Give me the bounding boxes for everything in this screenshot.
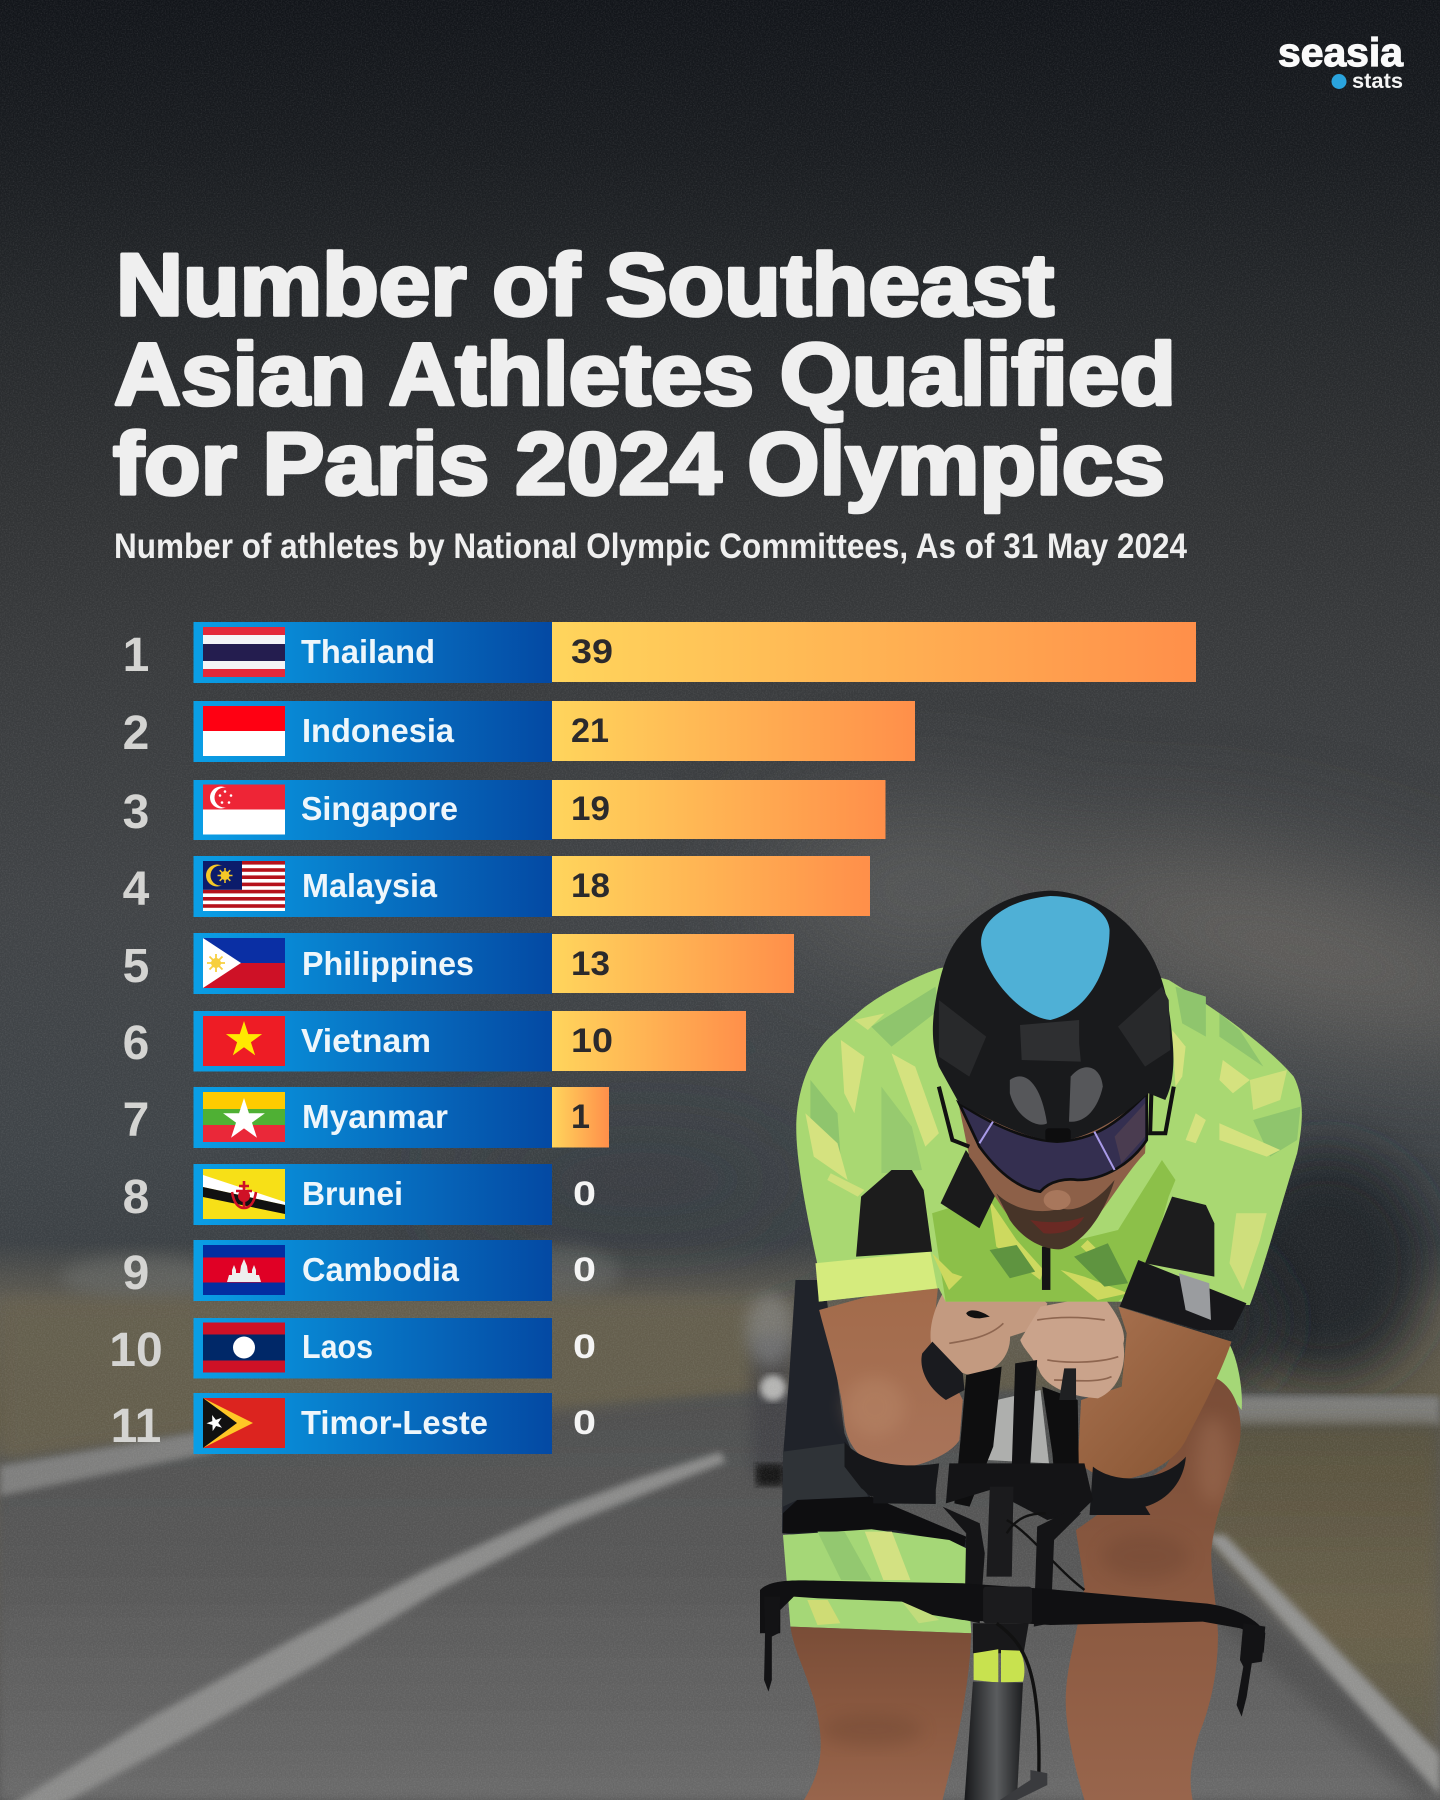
flag: Vietnam [203, 1016, 285, 1066]
flag: Philippines [203, 938, 285, 988]
country bar [194, 1318, 552, 1378]
value: 0 [573, 1175, 596, 1213]
row 10 Laos [109, 1318, 596, 1378]
left hand [931, 1275, 1047, 1375]
flag: Thailand [203, 627, 285, 677]
country name: Brunei [302, 1175, 403, 1212]
handlebar [760, 1580, 1265, 1653]
right hand [1020, 1295, 1124, 1398]
value: 0 [573, 1328, 596, 1366]
lower body [760, 1275, 1265, 1800]
watch [921, 1342, 964, 1400]
country bar [194, 1011, 552, 1072]
country bar [194, 1240, 552, 1301]
value: 1 [571, 1098, 590, 1136]
country name: Timor-Leste [301, 1404, 488, 1441]
rank: 10 [109, 1324, 163, 1377]
bike hub [946, 1463, 1093, 1520]
rank: 9 [123, 1247, 149, 1300]
country bar [194, 1087, 552, 1148]
brake cable [997, 1623, 1039, 1773]
rank: 5 [123, 940, 149, 993]
upper body [796, 891, 1302, 1330]
flag: Singapore [203, 784, 285, 834]
rank: 7 [123, 1094, 149, 1147]
flag: Timor-Leste [203, 1398, 285, 1448]
value: 19 [571, 790, 610, 828]
green shorts right [1216, 1345, 1242, 1410]
lips [1030, 1217, 1084, 1234]
left riser [943, 1507, 985, 1623]
country bar [194, 780, 552, 840]
country name: Laos [302, 1328, 373, 1365]
central gap white frame [986, 1390, 1049, 1463]
row 8 Brunei [123, 1164, 596, 1225]
jersey chest [932, 1160, 1175, 1302]
country name: Myanmar [302, 1098, 448, 1135]
value: 39 [571, 633, 613, 671]
country name: Cambodia [302, 1251, 460, 1288]
left arm [819, 1277, 963, 1468]
row 4 Malaysia [123, 856, 870, 917]
subtitle: Number of athletes by National Olympic Committees, As of 31 May 2024 [114, 527, 1187, 566]
goggle visor [959, 1093, 1147, 1192]
jersey hem [815, 1252, 937, 1302]
armband [1120, 1260, 1246, 1330]
yellow frame band [974, 1649, 1024, 1683]
left elbow pad [844, 1442, 939, 1504]
left sleeve panel [856, 1170, 932, 1257]
left brake lever [764, 1597, 780, 1692]
rank: 11 [111, 1400, 161, 1453]
stem [986, 1487, 1014, 1577]
row 5 Philippines [123, 933, 794, 994]
left aero extension [954, 1367, 1002, 1507]
beard [996, 1180, 1115, 1249]
value: 10 [571, 1022, 613, 1060]
rank: 6 [123, 1017, 149, 1070]
flag: Malaysia [203, 861, 285, 911]
green shorts left [783, 1529, 971, 1633]
right arm [1078, 1307, 1232, 1480]
country bar [194, 1393, 552, 1454]
row 6 Vietnam [123, 1011, 746, 1072]
fork bracket [1000, 1770, 1047, 1800]
country bar [194, 701, 552, 762]
title: for Paris 2024 Olympics [113, 414, 1165, 513]
right leg [1066, 1378, 1241, 1800]
country bar [194, 856, 552, 917]
value: 13 [571, 945, 610, 983]
left leg [790, 1627, 971, 1800]
country name: Indonesia [302, 712, 455, 749]
value bar [552, 1011, 746, 1071]
rank: 2 [123, 707, 149, 760]
country name: Thailand [301, 633, 435, 670]
helmet [933, 891, 1173, 1142]
center tube [1012, 1360, 1037, 1467]
title: Number of Southeast [116, 235, 1054, 334]
rank: 4 [123, 863, 150, 916]
helmet blue patch [981, 896, 1110, 1020]
flag: Laos [203, 1322, 285, 1372]
value bar [552, 1087, 609, 1148]
title: Asian Athletes Qualified [114, 324, 1176, 424]
shorts band [783, 1443, 868, 1507]
value: 18 [571, 867, 610, 905]
right aero extension [1042, 1387, 1079, 1513]
right sleeve panel [1145, 1197, 1214, 1277]
jersey [796, 947, 1302, 1305]
row 2 Indonesia [123, 701, 915, 762]
country bar [194, 933, 552, 994]
head tube [973, 1623, 1029, 1653]
logo sublabel: stats [1352, 69, 1403, 93]
logo icon [1332, 74, 1346, 89]
right elbow pad [1090, 1457, 1186, 1515]
row 11 Timor-Leste [111, 1393, 596, 1454]
helmet vents [1010, 1076, 1047, 1125]
row 3 Singapore [123, 780, 886, 840]
value bar [552, 934, 794, 993]
down tube [964, 1682, 1023, 1800]
right brake lever [1237, 1623, 1265, 1717]
visor mount [1045, 1128, 1071, 1142]
jersey pattern [805, 987, 1301, 1290]
ranked bar chart [109, 622, 1196, 1454]
flag: Cambodia [203, 1245, 285, 1295]
row 9 Cambodia [123, 1240, 596, 1301]
helmet strap [939, 1080, 1174, 1147]
bar clamp [983, 1587, 1032, 1623]
flag: Indonesia [203, 706, 285, 756]
helmet tape [1020, 1020, 1081, 1062]
logo wordmark: seasia [1278, 31, 1404, 75]
rank: 3 [123, 786, 149, 839]
country name: Singapore [301, 790, 458, 827]
value bar [552, 856, 870, 916]
rank: 1 [123, 629, 149, 682]
logo: seasia stats [1278, 31, 1404, 93]
collar panel [941, 1150, 996, 1228]
flag: Myanmar [203, 1092, 285, 1142]
rank: 8 [123, 1171, 149, 1224]
value: 21 [571, 712, 609, 750]
dark torso side [782, 1280, 966, 1553]
country name: Philippines [302, 945, 474, 982]
country bar [194, 622, 552, 683]
country name: Vietnam [301, 1022, 431, 1059]
value: 0 [573, 1251, 596, 1289]
zipper [1042, 1247, 1050, 1290]
country name: Malaysia [302, 867, 438, 904]
flag: Brunei [203, 1169, 285, 1219]
shorts black band [783, 1497, 966, 1547]
title [113, 235, 1176, 513]
nose [1044, 1190, 1071, 1210]
brake stub in hand [966, 1310, 990, 1318]
value bar [552, 622, 1196, 682]
value bar [552, 780, 886, 839]
cyclist illustration [760, 891, 1302, 1800]
row 1 Thailand [123, 622, 1196, 683]
value: 0 [573, 1404, 596, 1442]
face [959, 1093, 1148, 1247]
right riser [1034, 1513, 1081, 1627]
row 7 Myanmar [123, 1087, 609, 1148]
value bar [552, 701, 915, 761]
country bar [194, 1164, 552, 1225]
